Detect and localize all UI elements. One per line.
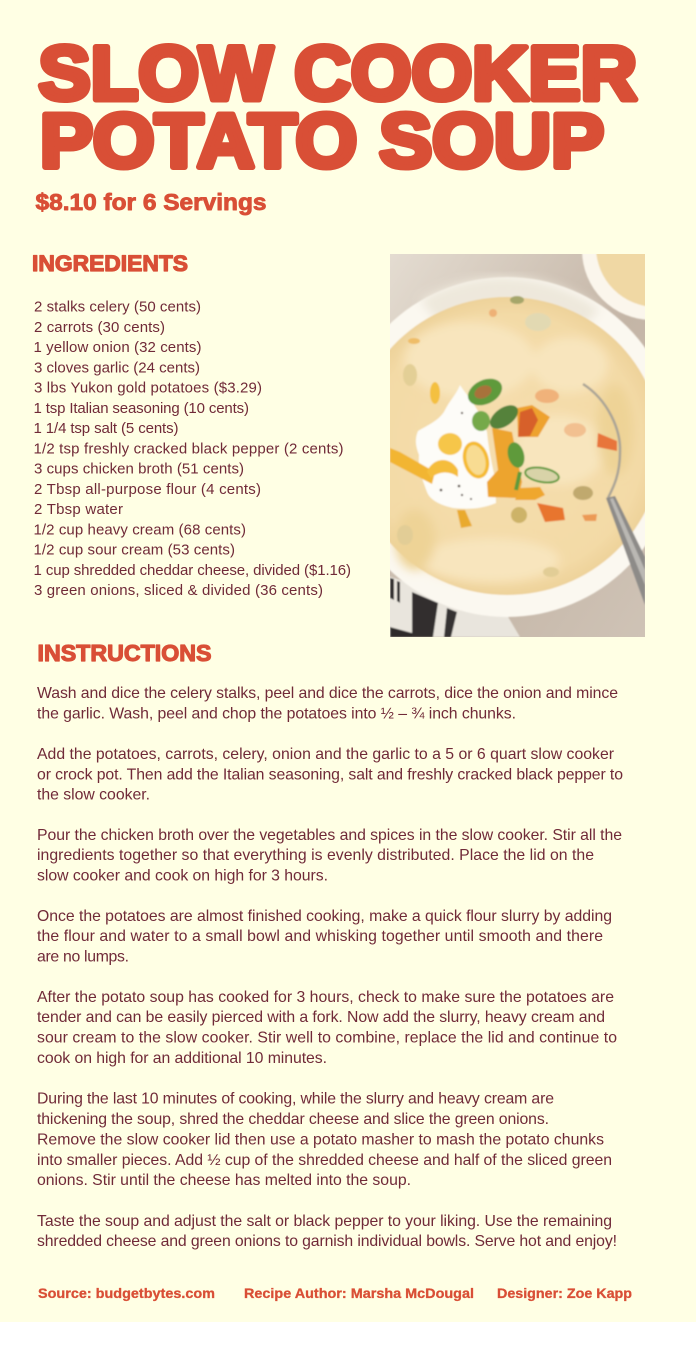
- step 1: [37, 685, 618, 722]
- step 6: onions. Stir until the cheese has melted into the soup.: [37, 1172, 411, 1189]
- step 6: Remove the slow cooker lid then use a potato masher to mash the potato chunks: [37, 1132, 604, 1148]
- footer credits: Recipe Author: Marsha McDougal: [244, 1285, 474, 1301]
- footer credits: Source: budgetbytes.com: [38, 1285, 215, 1301]
- step 4: Once the potatoes are almost finished cooking, make a quick flour slurry by adding: [37, 908, 612, 925]
- step 2: [37, 746, 623, 804]
- green onions: [464, 374, 560, 490]
- step 3: [37, 827, 622, 884]
- ingredients list: 1 cup shredded cheddar cheese, divided ($1.16): [34, 562, 351, 579]
- step 6: [37, 1090, 612, 1189]
- step 3: Pour the chicken broth over the vegetables and spices in the slow cooker. Stir all the: [37, 827, 622, 844]
- spoon: [583, 384, 645, 605]
- step 4: the flour and water to a small bowl and whisking together until smooth and there: [37, 928, 603, 945]
- step 5: [37, 989, 617, 1067]
- second bowl, upper right: [582, 254, 645, 320]
- footer credits: Designer: Zoe Kapp: [497, 1285, 632, 1301]
- step 6: During the last 10 minutes of cooking, while the slurry and heavy cream are: [37, 1090, 554, 1108]
- ingredients list: 3 cloves garlic (24 cents): [34, 359, 200, 376]
- photo: bowl of potato soup: [390, 254, 645, 637]
- step 4: [37, 908, 612, 966]
- ingredients list: 2 stalks celery (50 cents): [34, 298, 201, 316]
- step 2: the slow cooker.: [37, 786, 150, 804]
- ingredients list: [34, 298, 351, 599]
- title: SLOW COOKER: [38, 32, 637, 117]
- ingredients list: 2 Tbsp all-purpose flour (4 cents): [34, 481, 261, 498]
- step 4: are no lumps.: [37, 948, 129, 966]
- pepper specks: [440, 412, 472, 500]
- title: POTATO SOUP: [40, 99, 604, 184]
- ingredients list: 1 yellow onion (32 cents): [34, 339, 202, 356]
- ingredients list: 2 carrots (30 cents): [34, 319, 165, 336]
- ingredients list: 3 cups chicken broth (51 cents): [34, 461, 244, 478]
- ingredients list: 1 tsp Italian seasoning (10 cents): [34, 400, 249, 417]
- step 3: ingredients together so that everything is evenly distributed. Place the lid on the: [37, 847, 594, 864]
- soup surface: [390, 296, 645, 596]
- step 1: Wash and dice the celery stalks, peel and dice the carrots, dice the onion and mince: [37, 685, 618, 702]
- ingredients list: 1/2 tsp freshly cracked black pepper (2 cents): [34, 440, 344, 457]
- ingredients list: 3 lbs Yukon gold potatoes ($3.29): [34, 380, 262, 397]
- white bowl rim: [390, 276, 645, 618]
- step 2: or crock pot. Then add the Italian seasoning, salt and freshly cracked black pepper to: [37, 766, 623, 784]
- ingredients list: 3 green onions, sliced & divided (36 cents): [34, 582, 323, 599]
- step 6: thickening the soup, shred the cheddar cheese and slice the green onions.: [37, 1111, 549, 1128]
- step 3: slow cooker and cook on high for 3 hours.: [37, 868, 328, 884]
- step 2: Add the potatoes, carrots, celery, onion and the garlic to a 5 or 6 quart slow cooker: [37, 746, 614, 763]
- title: [38, 32, 637, 184]
- subtitle: cost and servings: $8.10 for 6 Servings: [36, 189, 266, 215]
- step 5: After the potato soup has cooked for 3 hours, check to make sure the potatoes are: [37, 989, 614, 1006]
- ingredients list: 1/2 cup heavy cream (68 cents): [34, 521, 246, 538]
- footer credits: [38, 1285, 632, 1301]
- ingredients list: 1 1/4 tsp salt (5 cents): [34, 420, 178, 437]
- step 7: Taste the soup and adjust the salt or black pepper to your liking. Use the remaining: [37, 1213, 612, 1230]
- soup highlights: [395, 322, 633, 582]
- heading: ingredients: INGREDIENTS: [32, 251, 188, 276]
- step 6: into smaller pieces. Add ½ cup of the shredded cheese and half of the sliced green: [37, 1152, 612, 1169]
- soup flecks: [397, 296, 617, 577]
- sour cream: [416, 385, 496, 509]
- instructions text: [37, 685, 623, 1250]
- ingredients list: 2 Tbsp water: [34, 501, 123, 518]
- shredded cheddar: [390, 382, 565, 528]
- ingredients list: 1/2 cup sour cream (53 cents): [34, 542, 235, 559]
- step 5: tender and can be easily pierced with a fork. Now add the slurry, heavy cream and: [37, 1009, 605, 1026]
- step 7: [37, 1213, 617, 1250]
- step 7: shredded cheese and green onions to garnish individual bowls. Serve hot and enjoy!: [37, 1233, 617, 1250]
- heading: instructions: INSTRUCTIONS: [38, 640, 211, 666]
- step 5: sour cream to the slow cooker. Stir well to combine, replace the lid and continue to: [37, 1030, 617, 1046]
- striped towel: [385, 575, 520, 637]
- step 1: the garlic. Wash, peel and chop the potatoes into ½ – ¾ inch chunks.: [37, 706, 516, 722]
- step 5: cook on high for an additional 10 minutes.: [37, 1050, 327, 1067]
